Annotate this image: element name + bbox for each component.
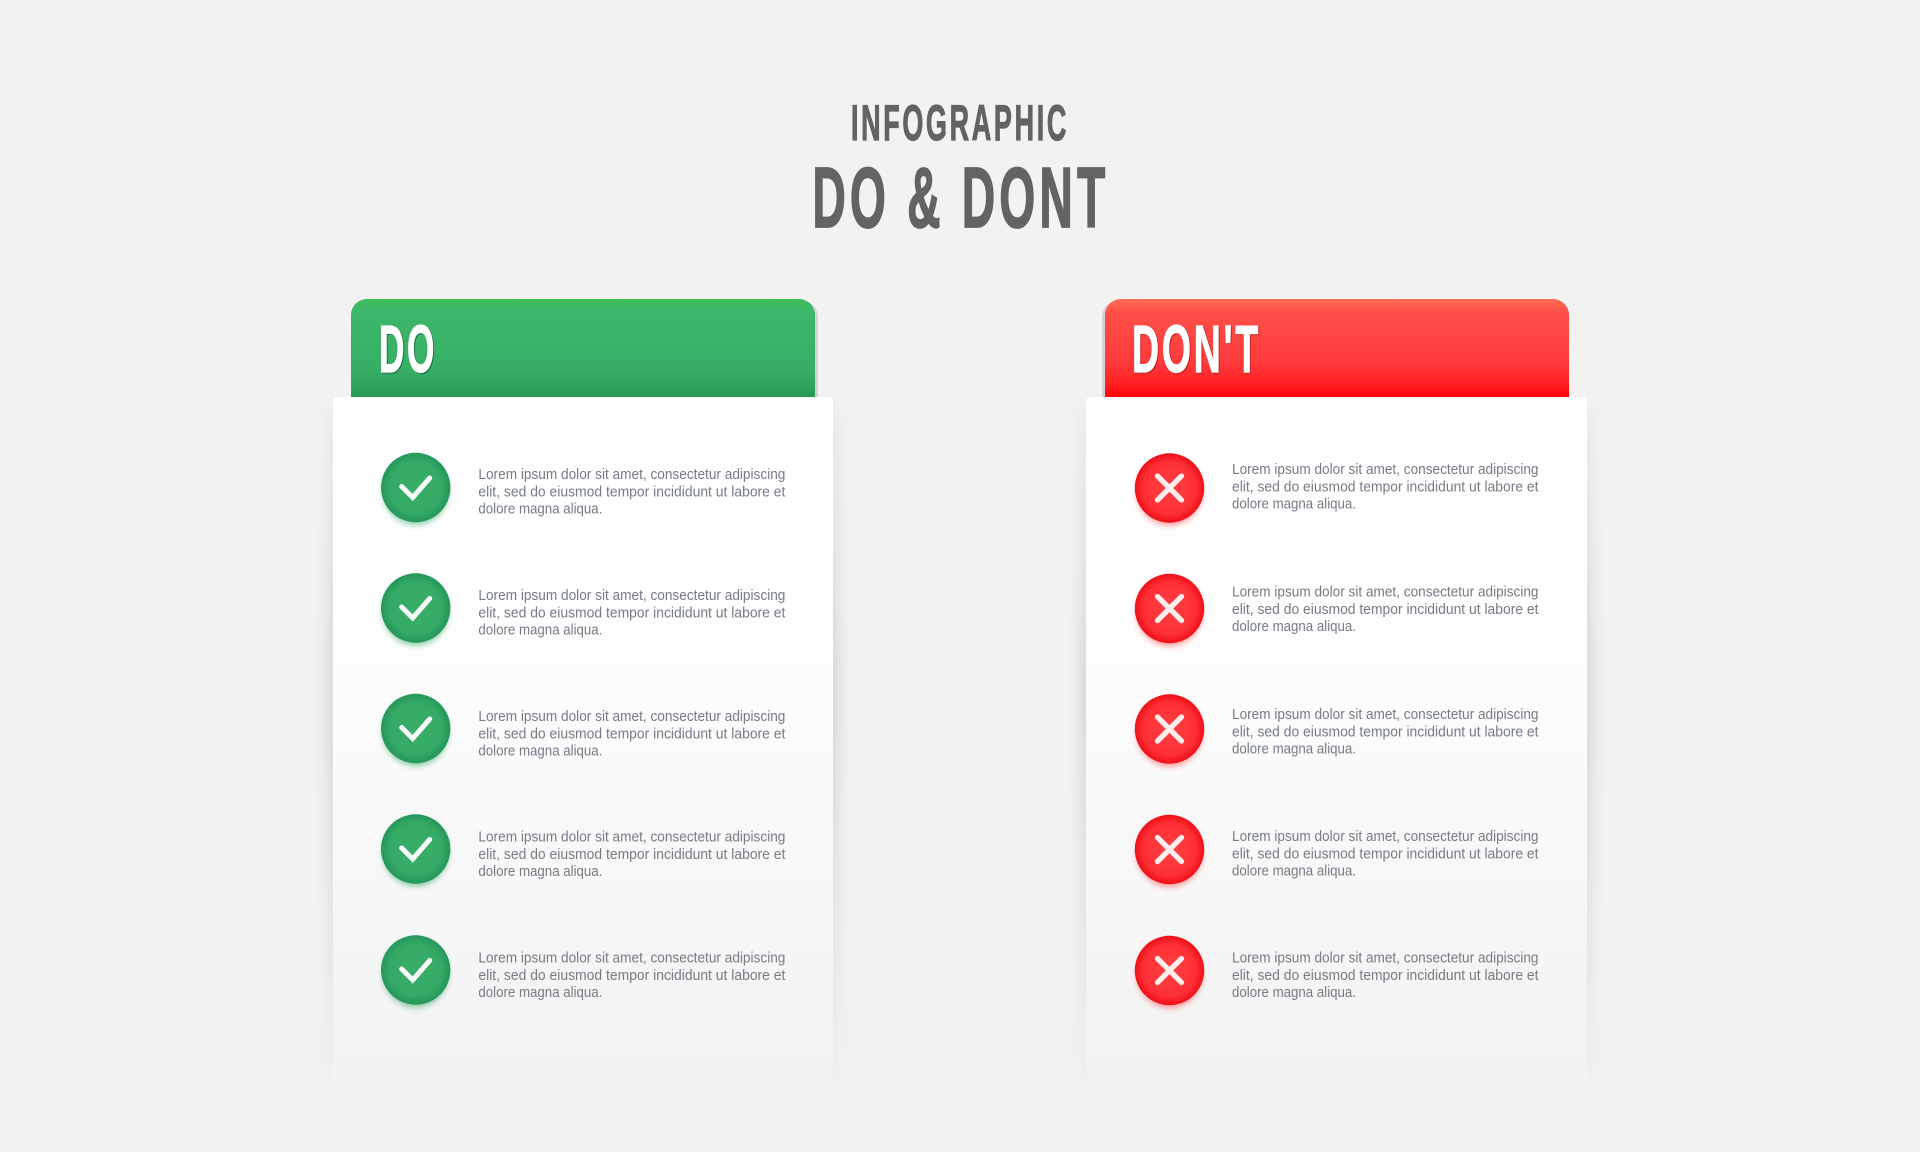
panel: dont xyxy=(1080,299,1593,1110)
text: dolore magna aliqua. xyxy=(478,863,602,880)
text xyxy=(478,950,786,1001)
icon: cross xyxy=(1135,453,1204,526)
text: dolore magna aliqua. xyxy=(478,984,602,1001)
icon: check xyxy=(381,573,450,646)
text xyxy=(478,708,786,760)
text xyxy=(1232,950,1539,1001)
header shadow xyxy=(1102,301,1400,397)
heading: infographic: INFOGRAPHIC xyxy=(851,95,1069,151)
text: dolore magna aliqua. xyxy=(478,501,602,518)
text: dolore magna aliqua. xyxy=(478,743,602,760)
text: Lorem ipsum dolor sit amet, consectetur adipiscing xyxy=(478,466,785,483)
item 5 xyxy=(1135,936,1539,1008)
card body xyxy=(333,397,833,1110)
text xyxy=(1232,706,1539,758)
text xyxy=(478,828,786,880)
icon: check xyxy=(381,814,450,886)
card body xyxy=(1086,397,1587,1110)
text: Lorem ipsum dolor sit amet, consectetur adipiscing xyxy=(1232,828,1538,845)
item 1 xyxy=(1135,453,1539,526)
text xyxy=(478,466,786,518)
text: elit, sed do eiusmod tempor incididunt ut labore et xyxy=(1232,478,1539,495)
text: elit, sed do eiusmod tempor incididunt ut labore et xyxy=(478,846,786,863)
item 1 xyxy=(381,453,786,525)
text xyxy=(1232,584,1539,635)
text: elit, sed do eiusmod tempor incididunt ut labore et xyxy=(478,725,786,742)
title xyxy=(812,95,1110,246)
text: dolore magna aliqua. xyxy=(478,622,602,639)
item 2 xyxy=(1135,574,1539,646)
panel: do xyxy=(327,299,839,1110)
text: dolore magna aliqua. xyxy=(1232,863,1356,880)
icon: check xyxy=(381,453,450,525)
item 4 xyxy=(1135,815,1539,887)
text: elit, sed do eiusmod tempor incididunt ut labore et xyxy=(1232,601,1539,618)
text: elit, sed do eiusmod tempor incididunt ut labore et xyxy=(1232,723,1539,740)
text: Lorem ipsum dolor sit amet, consectetur adipiscing xyxy=(1232,584,1538,600)
text xyxy=(1232,461,1539,513)
text: Lorem ipsum dolor sit amet, consectetur adipiscing xyxy=(1232,950,1538,966)
card shadow xyxy=(327,410,839,1110)
text: elit, sed do eiusmod tempor incididunt ut labore et xyxy=(478,604,786,621)
text xyxy=(478,587,786,639)
header label: do: DO xyxy=(379,312,437,387)
header label: don't: DON'T xyxy=(1132,312,1261,387)
heading: do and dont: DO & DONT xyxy=(812,151,1110,246)
header shadow xyxy=(370,301,818,397)
icon: cross xyxy=(1135,574,1204,646)
text xyxy=(1232,828,1539,880)
text: elit, sed do eiusmod tempor incididunt ut labore et xyxy=(1232,845,1539,862)
text: Lorem ipsum dolor sit amet, consectetur adipiscing xyxy=(1232,461,1538,478)
text: elit, sed do eiusmod tempor incididunt ut labore et xyxy=(478,967,786,984)
text: dolore magna aliqua. xyxy=(1232,984,1356,1001)
text: Lorem ipsum dolor sit amet, consectetur adipiscing xyxy=(478,708,785,725)
icon: check xyxy=(381,694,450,766)
text: Lorem ipsum dolor sit amet, consectetur adipiscing xyxy=(1232,706,1538,723)
text: elit, sed do eiusmod tempor incididunt ut labore et xyxy=(1232,967,1539,984)
text: Lorem ipsum dolor sit amet, consectetur adipiscing xyxy=(478,828,785,846)
header tab xyxy=(351,299,815,397)
item 2 xyxy=(381,573,786,646)
text: dolore magna aliqua. xyxy=(1232,618,1356,635)
icon: cross xyxy=(1135,936,1204,1008)
text: dolore magna aliqua. xyxy=(1232,741,1356,758)
text: dolore magna aliqua. xyxy=(1232,496,1356,513)
text: Lorem ipsum dolor sit amet, consectetur adipiscing xyxy=(478,587,785,604)
text: Lorem ipsum dolor sit amet, consectetur adipiscing xyxy=(478,950,785,966)
text: elit, sed do eiusmod tempor incididunt ut labore et xyxy=(478,483,786,500)
icon: cross xyxy=(1135,694,1204,766)
icon: cross xyxy=(1135,815,1204,887)
icon: check xyxy=(381,935,450,1008)
header tab xyxy=(1105,299,1569,397)
item 3 xyxy=(1135,694,1539,766)
item 3 xyxy=(381,694,786,766)
item 4 xyxy=(381,814,786,886)
card shadow xyxy=(1080,410,1593,1110)
item 5 xyxy=(381,935,786,1008)
